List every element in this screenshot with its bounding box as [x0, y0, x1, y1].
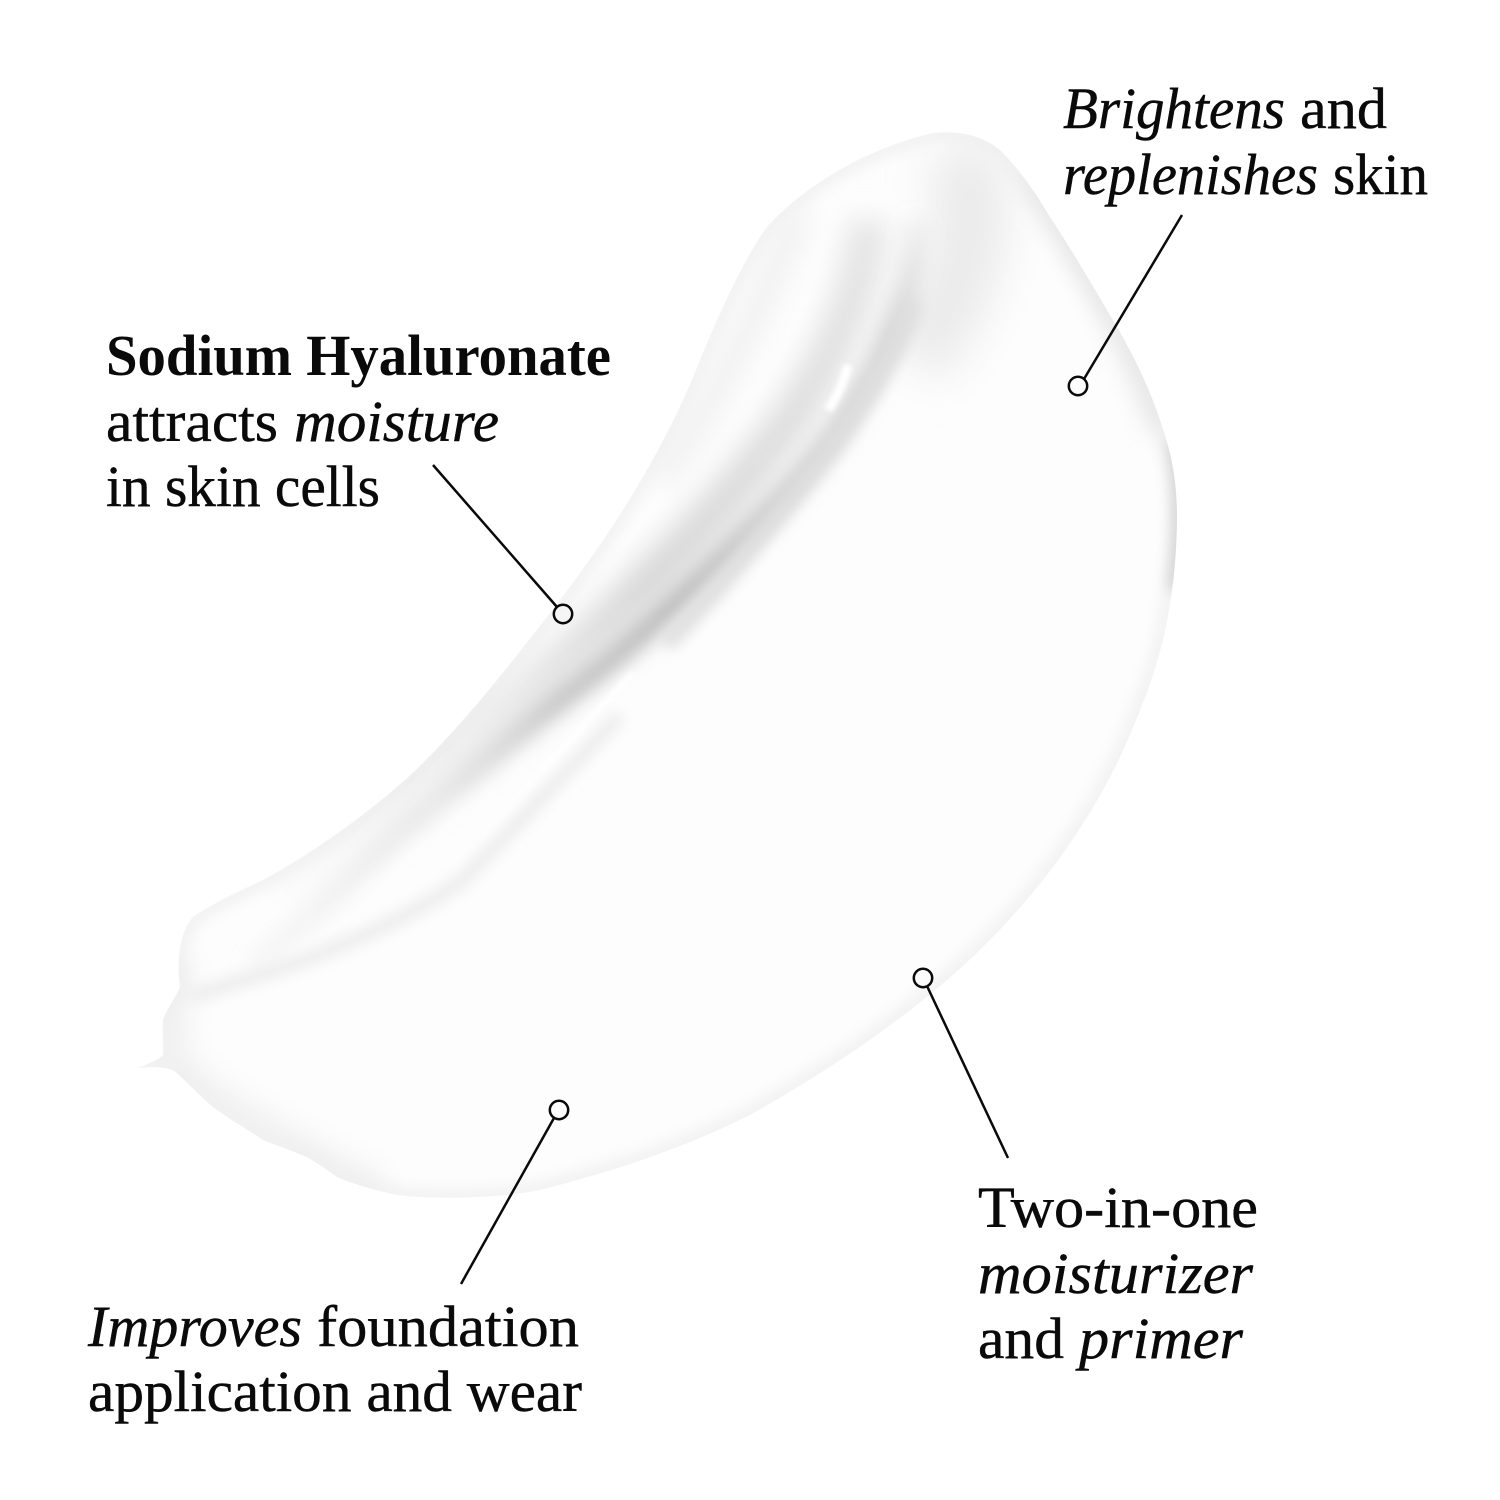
callout: sodium hyaluronate: attracts: [106, 389, 278, 454]
callout: improves foundation: Improves: [87, 1294, 302, 1359]
callout: improves foundation: application and wear: [88, 1359, 582, 1424]
callout: sodium hyaluronate: [106, 323, 611, 519]
callout: brightens: and: [1300, 76, 1387, 141]
soft band up-left of crease: [404, 216, 892, 805]
top shading: [915, 150, 971, 360]
callout: two-in-one: primer: [1075, 1306, 1243, 1371]
pointer: improves foundation: [461, 1101, 568, 1284]
pointer: two-in-one: [914, 969, 1008, 1158]
callout: two-in-one: Two-in-one: [978, 1175, 1258, 1240]
cream smear: [140, 132, 1177, 1198]
callout: sodium hyaluronate: in skin cells: [106, 454, 380, 519]
callout: sodium hyaluronate: moisture: [294, 389, 499, 454]
faint left streak: [676, 232, 792, 458]
callout: improves foundation: [87, 1294, 582, 1424]
callout: brightens: replenishes: [1063, 142, 1318, 207]
callout: two-in-one: [978, 1175, 1258, 1371]
callout: improves foundation: foundation: [317, 1294, 579, 1359]
right edge shadow: [1172, 440, 1180, 590]
callout: brightens: skin: [1333, 142, 1428, 207]
callout: sodium hyaluronate: Sodium Hyaluronate: [106, 323, 611, 388]
secondary band: [664, 354, 900, 650]
callout: brightens: [1063, 76, 1428, 207]
pointer: sodium hyaluronate: [433, 465, 572, 623]
pointer: brightens: [1069, 215, 1182, 395]
highlights: [828, 365, 848, 410]
callout: two-in-one: moisturizer: [978, 1241, 1253, 1306]
callout: two-in-one: and: [978, 1306, 1064, 1371]
lower ridge: [190, 715, 620, 997]
callout: brightens: Brightens: [1063, 76, 1285, 141]
main crease: [334, 232, 924, 896]
